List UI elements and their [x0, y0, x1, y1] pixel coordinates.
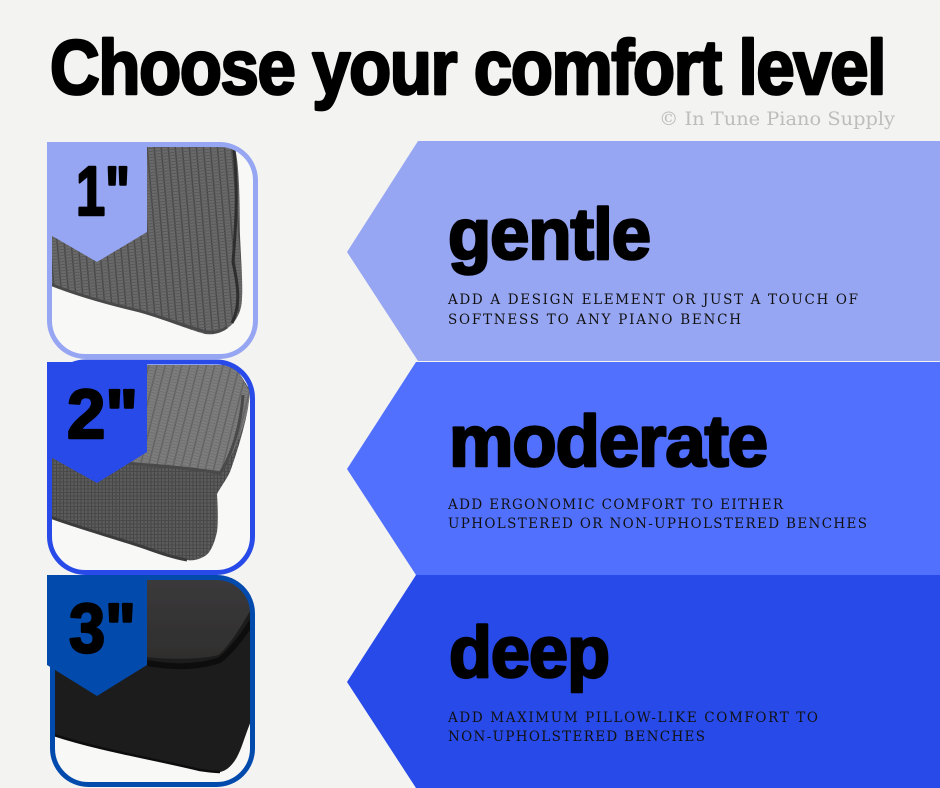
frame outline — [50, 144, 256, 356]
panel: deep — [347, 575, 940, 788]
frame outline — [50, 362, 252, 572]
description: moderate — [447, 497, 867, 532]
cushion photo: 2 inch — [50, 365, 250, 560]
photo card: 1 inch cushion — [47, 142, 256, 356]
pennant badge: 1 inch — [47, 142, 147, 262]
description: deep: NON-UPHOLSTERED BENCHES — [448, 729, 705, 745]
badge label: 3": 3" — [69, 589, 136, 667]
panel: gentle — [347, 141, 940, 361]
arrow banner: deep — [347, 575, 940, 788]
description: moderate: ADD ERGONOMIC COMFORT TO EITHER — [447, 497, 784, 513]
heading: gentle: gentle — [448, 195, 650, 275]
badge label: 1": 1" — [76, 152, 130, 230]
heading: moderate: moderate — [449, 402, 767, 482]
description: gentle: ADD A DESIGN ELEMENT OR JUST A TOUCH OF — [447, 292, 858, 308]
description: moderate: UPHOLSTERED OR NON-UPHOLSTERED BENCHES — [448, 516, 867, 532]
heading: deep: deep — [449, 613, 609, 693]
arrow banner: moderate — [347, 362, 940, 575]
photo card: 2 inch cushion — [47, 362, 252, 572]
badge label: 2": 2" — [67, 375, 138, 453]
copyright credit: © In Tune Piano Supply — [659, 109, 896, 130]
frame outline — [52, 578, 252, 784]
description: gentle: SOFTNESS TO ANY PIANO BENCH — [448, 312, 741, 328]
description: gentle — [447, 292, 858, 328]
cushion photo: 1 inch — [50, 147, 242, 334]
pennant badge: 2 inch — [47, 362, 147, 483]
panel: moderate — [347, 362, 940, 575]
description: deep — [447, 710, 818, 745]
photo card: 3 inch cushion — [47, 575, 253, 784]
pennant badge: 3 inch — [47, 575, 147, 696]
cushion photo: 3 inch — [54, 578, 253, 772]
arrow banner: gentle — [347, 141, 940, 361]
description: deep: ADD MAXIMUM PILLOW-LIKE COMFORT TO — [447, 710, 818, 726]
